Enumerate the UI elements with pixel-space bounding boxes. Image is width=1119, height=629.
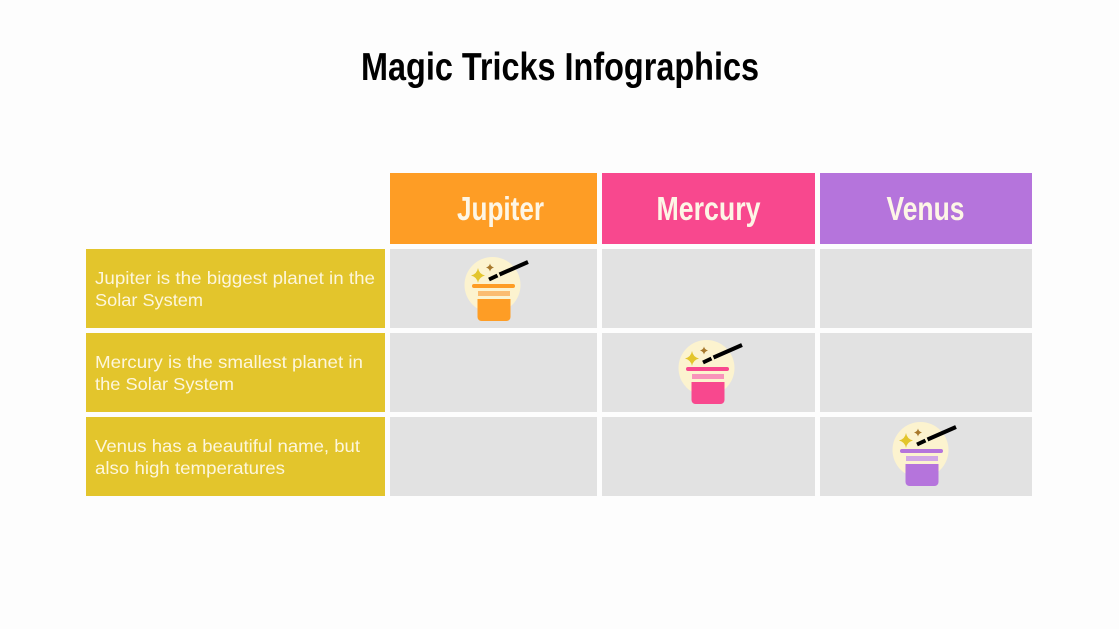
icon: magic hat pink	[678, 340, 742, 404]
icon: magic hat purple	[892, 422, 956, 486]
row label: Jupiter: Jupiter is the biggest planet in the	[95, 268, 375, 288]
header: Mercury	[602, 173, 815, 244]
row label: Venus: also high temperatures	[95, 458, 285, 478]
grey table cells	[390, 249, 1032, 496]
header: Venus	[820, 173, 1032, 244]
header: Jupiter	[390, 173, 597, 244]
row label: Jupiter: Solar System	[95, 290, 203, 310]
row label: Mercury	[86, 333, 385, 412]
row label: Jupiter	[86, 249, 385, 328]
table	[86, 173, 1032, 496]
row label: Venus: Venus has a beautiful name, but	[95, 436, 360, 456]
row label: Venus	[86, 417, 385, 496]
header: Venus: Venus	[886, 190, 964, 227]
icon: magic hat orange	[464, 257, 528, 321]
header: Mercury: Mercury	[656, 190, 761, 227]
header: Jupiter: Jupiter	[457, 190, 544, 227]
title: Magic Tricks Infographics	[361, 46, 759, 89]
row label: Mercury: the Solar System	[95, 374, 234, 394]
row label: Mercury: Mercury is the smallest planet in	[95, 352, 363, 372]
